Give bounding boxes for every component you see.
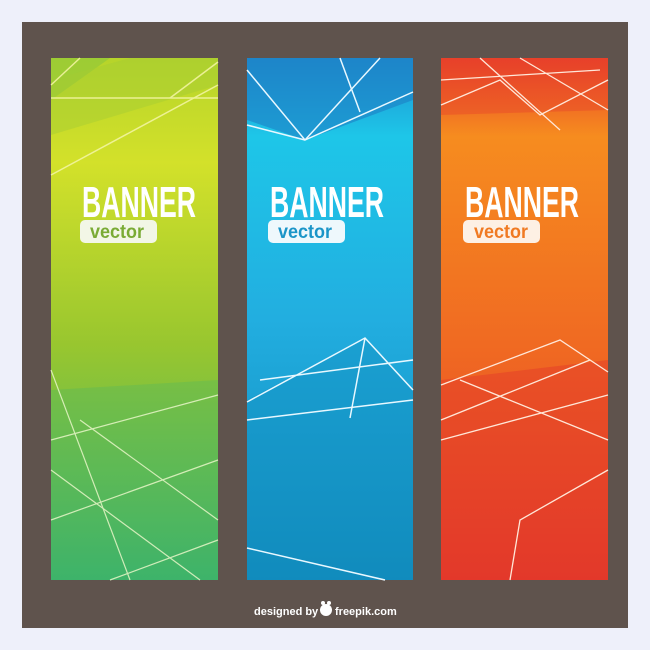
pill: vector green: vector: [90, 222, 145, 243]
footer credit: designed by: [254, 606, 319, 618]
panel: green banner: [51, 58, 218, 580]
footer credit: [254, 601, 397, 618]
heading: BANNER orange: BANNER: [465, 178, 579, 227]
pill: vector blue: vector: [278, 222, 333, 243]
panel: orange banner: [441, 58, 608, 580]
footer credit: freepik.com: [335, 606, 397, 618]
pill: vector orange: [463, 220, 540, 243]
icon: freepik logo: [320, 601, 332, 616]
heading: BANNER blue: BANNER: [270, 178, 384, 227]
pill: vector blue: [268, 220, 345, 243]
pill: vector orange: vector: [474, 222, 529, 243]
pill: vector green: [80, 220, 157, 243]
heading: BANNER green: BANNER: [82, 178, 196, 227]
panel: blue banner: [247, 58, 413, 580]
